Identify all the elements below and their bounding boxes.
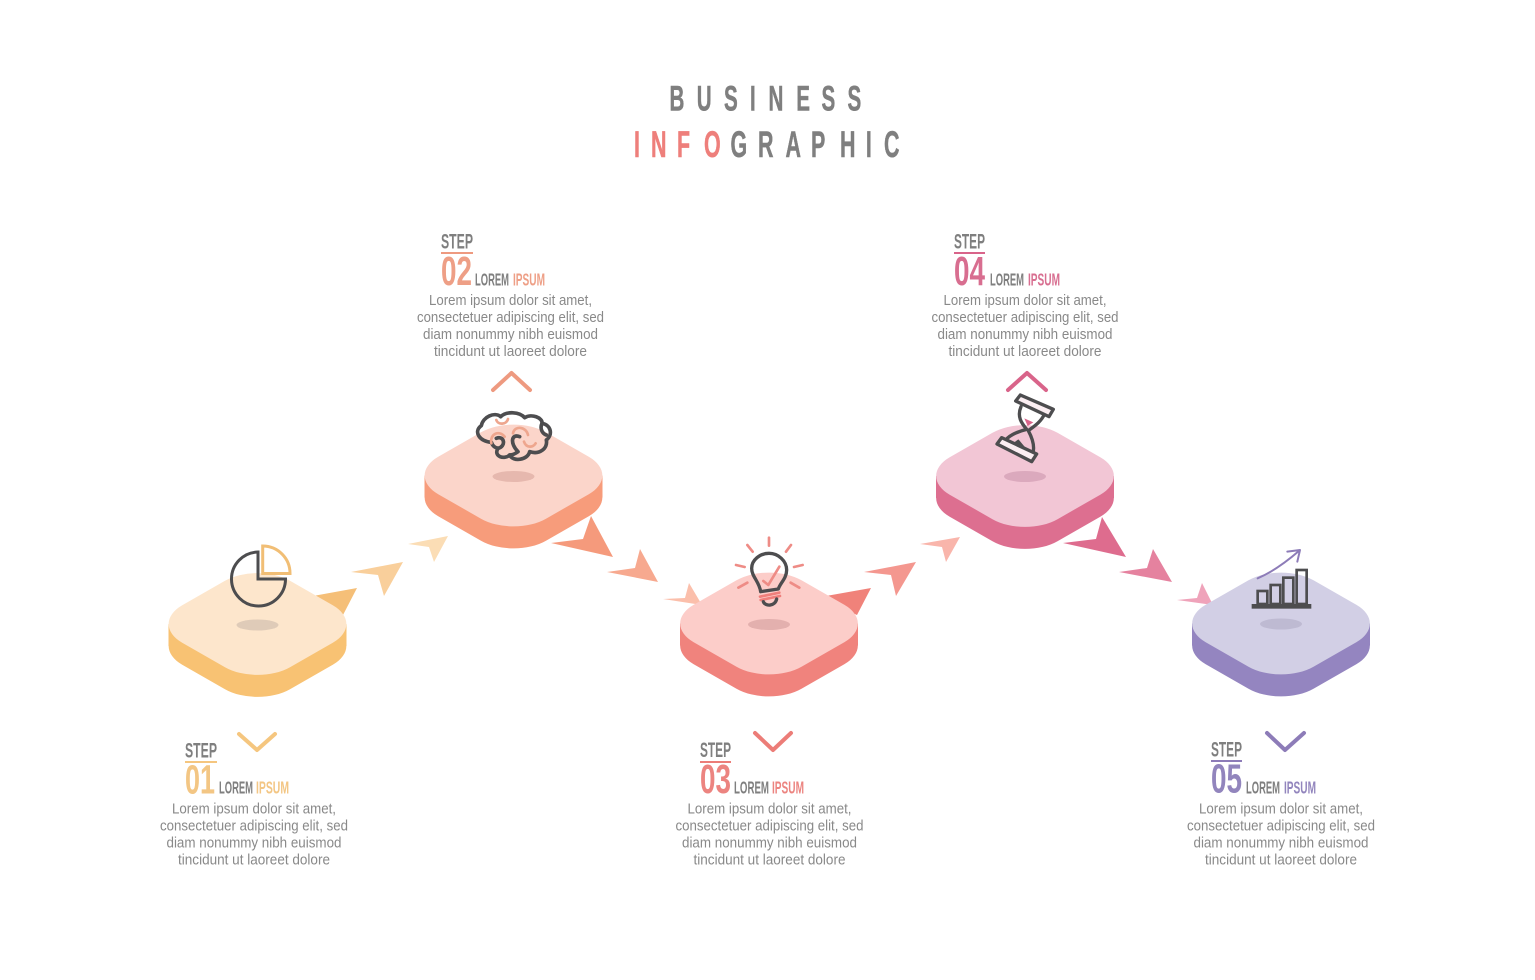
- text block: step 5: STEP: [1211, 738, 1242, 762]
- icon: pie chart: [231, 546, 290, 606]
- text block: step 1: consectetuer adipiscing elit, sed: [160, 818, 348, 834]
- icon: brain: [478, 413, 550, 459]
- text block: step 1: STEP: [185, 740, 217, 762]
- text block: step 4: STEP: [954, 230, 985, 254]
- text block: step 4: [932, 230, 1118, 360]
- arrows: step 3 to step 4: [826, 537, 960, 615]
- text block: step 3: 03: [700, 756, 731, 802]
- text block: step 2: STEP: [441, 230, 473, 254]
- chevron: step 5: [1267, 733, 1304, 750]
- title line: INFOGRAPHIC: INFO: [634, 125, 721, 166]
- icon: hourglass: [997, 395, 1053, 462]
- platform: step 2: [424, 425, 602, 548]
- text block: step 4: IPSUM: [1028, 270, 1060, 290]
- text block: step 1: Lorem ipsum dolor sit amet,: [172, 802, 336, 818]
- text block: step 2: diam nonummy nibh euismod: [423, 327, 598, 343]
- platform: step 4: [936, 425, 1114, 549]
- text block: step 1: diam nonummy nibh euismod: [166, 836, 342, 852]
- title line: BUSINESS: BUSINESS: [669, 80, 861, 119]
- text block: step 4: LOREM: [990, 270, 1024, 290]
- text block: step 4: tincidunt ut laoreet dolore: [948, 344, 1102, 360]
- chevron: step 1: [239, 734, 275, 750]
- text block: step 1: IPSUM: [256, 778, 289, 798]
- text block: step 4: 04: [954, 248, 985, 294]
- text block: step 3: LOREM: [734, 778, 769, 798]
- title: [634, 80, 899, 166]
- text block: step 3: IPSUM: [772, 778, 804, 798]
- text block: step 2: IPSUM: [513, 270, 545, 290]
- text block: step 4: diam nonummy nibh euismod: [938, 327, 1112, 343]
- text block: step 1: [160, 740, 348, 868]
- text block: step 2: Lorem ipsum dolor sit amet,: [429, 293, 592, 309]
- text block: step 5: Lorem ipsum dolor sit amet,: [1199, 802, 1363, 818]
- title line: INFOGRAPHIC: GRAPHIC: [731, 125, 899, 166]
- text block: step 3: Lorem ipsum dolor sit amet,: [688, 802, 852, 818]
- text block: step 1: 01: [185, 756, 215, 802]
- text block: step 4: Lorem ipsum dolor sit amet,: [944, 293, 1106, 309]
- text block: step 3: tincidunt ut laoreet dolore: [694, 852, 846, 868]
- chevron: step 2: [493, 373, 530, 390]
- chevron: step 3: [755, 733, 791, 750]
- text block: step 5: diam nonummy nibh euismod: [1194, 836, 1368, 852]
- text block: step 2: tincidunt ut laoreet dolore: [434, 344, 587, 360]
- text block: step 5: 05: [1211, 756, 1242, 802]
- arrows: step 1 to step 2: [313, 536, 448, 615]
- text block: step 5: tincidunt ut laoreet dolore: [1205, 852, 1357, 868]
- platform: step 1: [168, 573, 346, 697]
- text block: step 3: diam nonummy nibh euismod: [682, 836, 857, 852]
- text block: step 5: IPSUM: [1284, 778, 1316, 798]
- text block: step 2: [417, 230, 604, 360]
- text block: step 3: [676, 739, 864, 868]
- text block: step 5: consectetuer adipiscing elit, sed: [1187, 818, 1375, 834]
- icon: light bulb: [736, 538, 803, 605]
- icon: bar chart with arrow: [1252, 550, 1311, 609]
- text block: step 1: tincidunt ut laoreet dolore: [178, 852, 330, 868]
- platform: step 3: [680, 573, 858, 696]
- text block: step 2: consectetuer adipiscing elit, sed: [417, 310, 604, 326]
- text block: step 1: LOREM: [219, 778, 253, 798]
- text block: step 4: consectetuer adipiscing elit, sed: [932, 310, 1118, 326]
- chevron: step 4: [1008, 373, 1046, 390]
- text block: step 3: STEP: [700, 739, 731, 762]
- text block: step 5: [1187, 738, 1375, 868]
- text block: step 2: 02: [441, 248, 472, 294]
- text block: step 3: consectetuer adipiscing elit, sed: [676, 818, 864, 834]
- text block: step 2: LOREM: [475, 270, 509, 290]
- text block: step 5: LOREM: [1246, 778, 1280, 798]
- arrows: step 2 to step 3: [551, 516, 702, 605]
- arrows: step 4 to step 5: [1063, 517, 1213, 605]
- platform: step 5: [1192, 573, 1370, 696]
